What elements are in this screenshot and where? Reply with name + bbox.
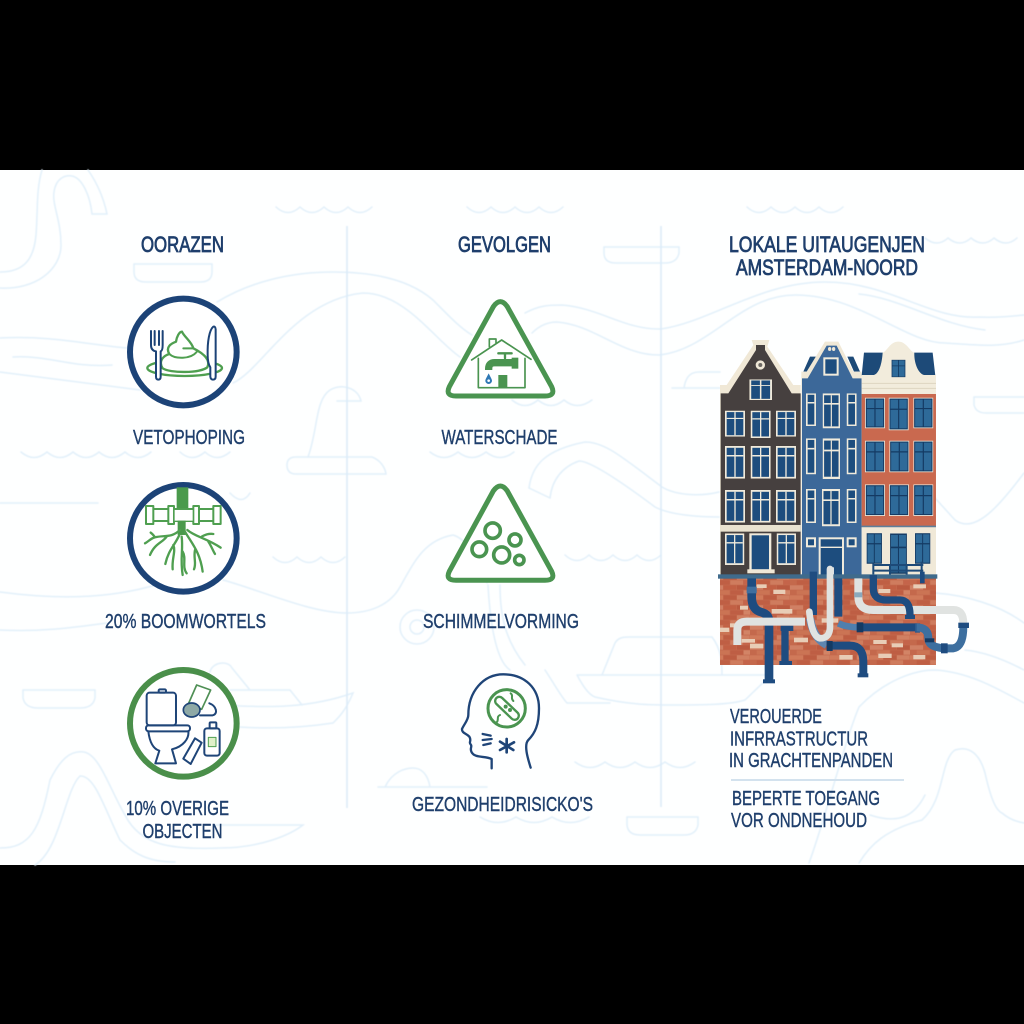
illustration: canal houses	[720, 340, 936, 577]
icon: mould warning	[448, 486, 553, 580]
label: 10% other objects: 10% OVERIGE	[126, 798, 229, 820]
heading: local challenges Amsterdam-Noord: AMSTERDAM-NOORD	[736, 255, 918, 280]
icon: toilet and other objects	[130, 670, 237, 777]
heading: local challenges Amsterdam-Noord	[729, 232, 925, 280]
panel: local challenges	[718, 232, 969, 832]
icon: tree roots in pipe	[130, 485, 237, 592]
background: faint water and pipe line pattern	[0, 170, 1024, 865]
label: 10% other objects: OBJECTEN	[142, 821, 222, 843]
icon: grease on a plate	[130, 299, 237, 405]
text: limited maintenance access: BEPERTE TOEGANG	[732, 788, 880, 810]
text: outdated infrastructure: VEROUERDE	[730, 706, 822, 728]
heading: consequences: GEVOLGEN	[458, 232, 551, 257]
label: 10% other objects	[126, 798, 229, 843]
page background	[0, 170, 1024, 865]
label: mould growth: SCHIMMELVORMING	[423, 611, 579, 633]
label: fat build-up: VETOPHOPING	[133, 427, 245, 449]
icon: head with bacterium	[462, 674, 539, 768]
illustration: brick foundation with pipes	[718, 569, 969, 683]
label: 20% tree roots: 20% BOOMWORTELS	[105, 611, 266, 633]
label: water damage: WATERSCHADE	[442, 427, 558, 449]
label: health risks: GEZONDHEIDRISICKO'S	[412, 794, 593, 816]
text: limited maintenance access: VOR ONDNEHOUD	[731, 810, 867, 832]
text: outdated infrastructure: IN GRACHTENPANDEN	[729, 750, 893, 772]
panel: causes	[105, 232, 266, 843]
text: limited maintenance access	[731, 788, 880, 832]
text: outdated infrastructure: INFRRASTRUCTUR	[730, 728, 868, 750]
text: outdated infrastructure	[729, 706, 893, 772]
heading: local challenges Amsterdam-Noord: LOKALE UITAUGENJEN	[729, 232, 925, 257]
icon: water damage warning	[448, 302, 553, 396]
panel: consequences	[412, 232, 593, 816]
heading: causes: OORAZEN	[141, 232, 224, 257]
